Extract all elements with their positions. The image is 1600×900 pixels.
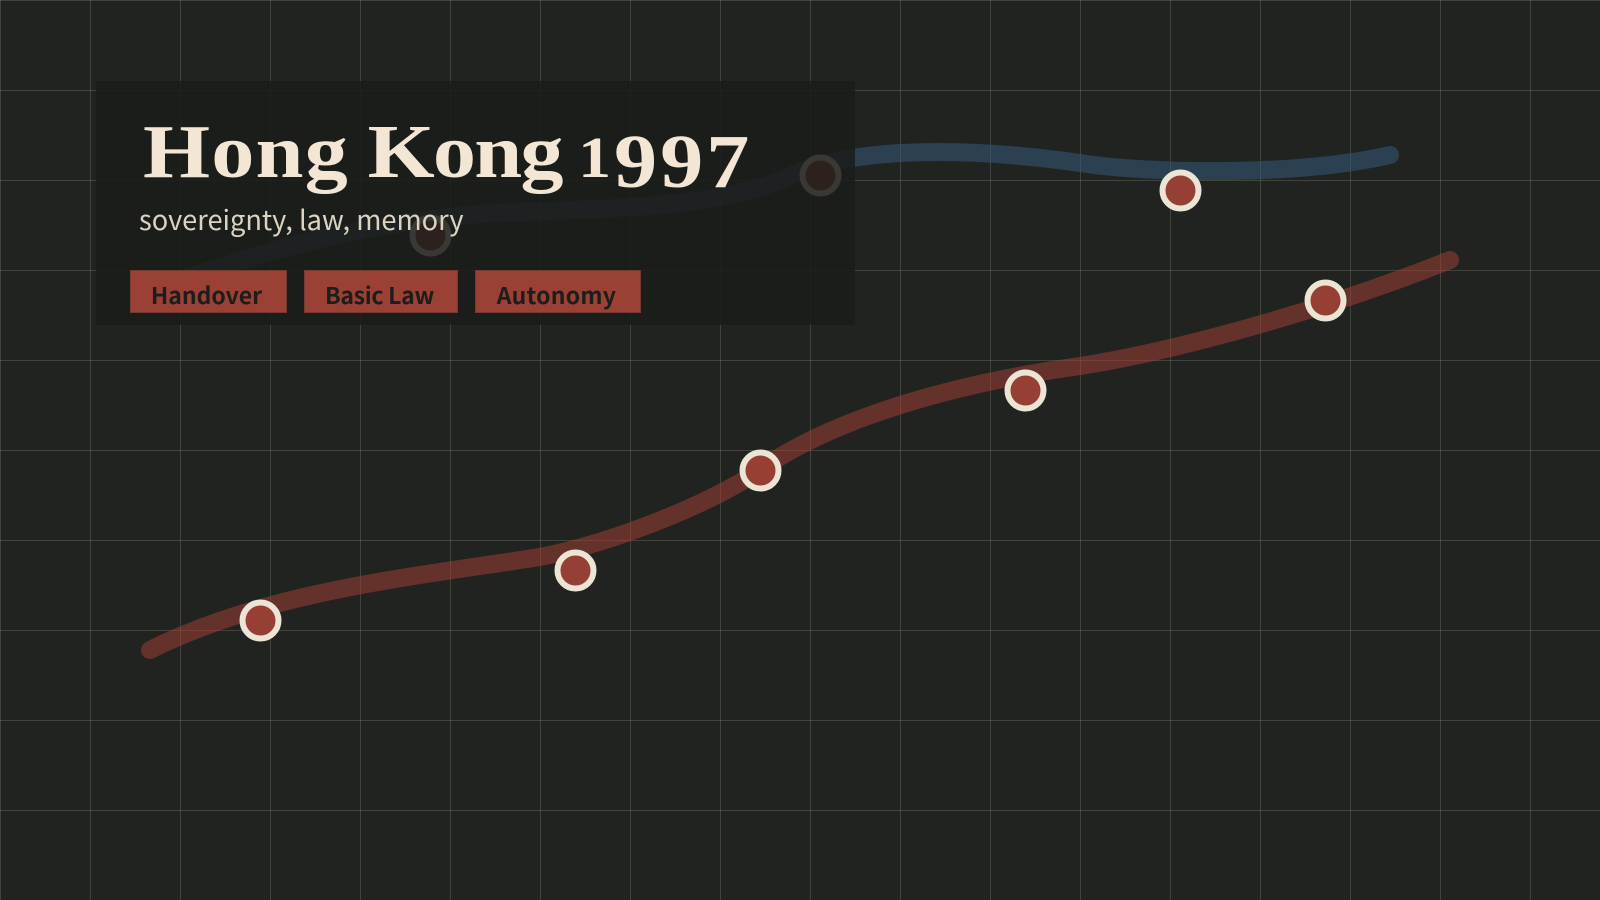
curve: blue line [150,152,1390,291]
panel: title block [96,81,855,325]
tag: Basic Law: Basic Law [325,277,434,311]
tag: Handover [130,270,287,313]
tag: Handover: Handover [151,277,262,311]
curve: red line [150,260,1450,650]
title: Hong Kong 1997 [143,110,752,204]
markers: timeline events [242,158,1344,638]
subtitle: sovereignty, law, memory [139,198,464,238]
tag: Autonomy: Autonomy [497,277,616,311]
tag: Basic Law [304,270,458,313]
tag: Autonomy [475,270,641,313]
